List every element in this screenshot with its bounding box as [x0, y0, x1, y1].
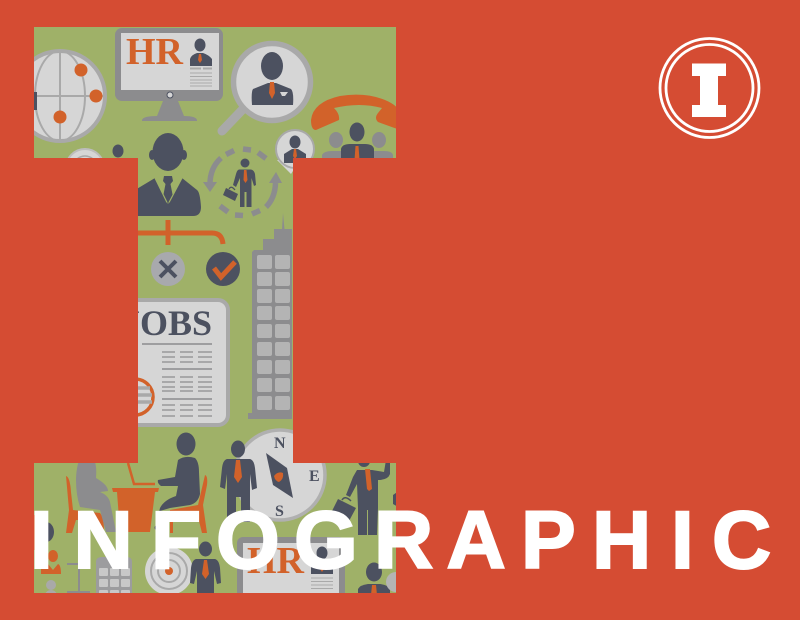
icon: compass	[235, 430, 325, 520]
icon: large businessman	[138, 133, 201, 216]
icon: JOBS newspaper	[138, 298, 230, 427]
icon: reject cross	[151, 252, 185, 286]
icon: compass: E	[309, 468, 320, 485]
icon: standing person bottom	[190, 542, 221, 595]
icon: second HR monitor	[237, 537, 345, 593]
icon: HR monitor	[115, 28, 223, 121]
icon: magnifier with person	[222, 44, 310, 131]
icon: rotation arrows with employee	[203, 149, 282, 216]
icon: walking employee with briefcase	[332, 463, 396, 535]
title: INFOGRAPHIC	[30, 495, 771, 586]
icon: approve check	[206, 252, 240, 286]
icon: skyscraper	[248, 213, 292, 419]
icon: JOBS newspaper: JOBS	[122, 303, 212, 343]
icon: second HR monitor: HR	[247, 540, 305, 582]
icon: bottom left people	[34, 515, 61, 593]
icon: HR monitor: HR	[126, 31, 184, 73]
icon: bust bottom right	[358, 562, 396, 593]
icon: grey stand	[67, 564, 90, 592]
logo: circled block I	[660, 38, 759, 138]
icon: team group	[322, 122, 393, 160]
letter I collage panel	[15, 27, 406, 607]
icon: globe	[34, 49, 107, 143]
icon: calculator grid	[96, 557, 132, 593]
icon: telephone handset	[311, 95, 400, 130]
icon: compass: S	[275, 503, 284, 520]
icon: small circle and head top left	[68, 144, 124, 158]
icon: orange branching line	[130, 220, 223, 245]
icon: small person pin	[276, 130, 314, 174]
icon: compass: N	[274, 435, 286, 452]
icon: target	[145, 547, 193, 595]
icon: standing employee	[220, 440, 257, 522]
icon: seated worker and desk	[66, 432, 207, 533]
